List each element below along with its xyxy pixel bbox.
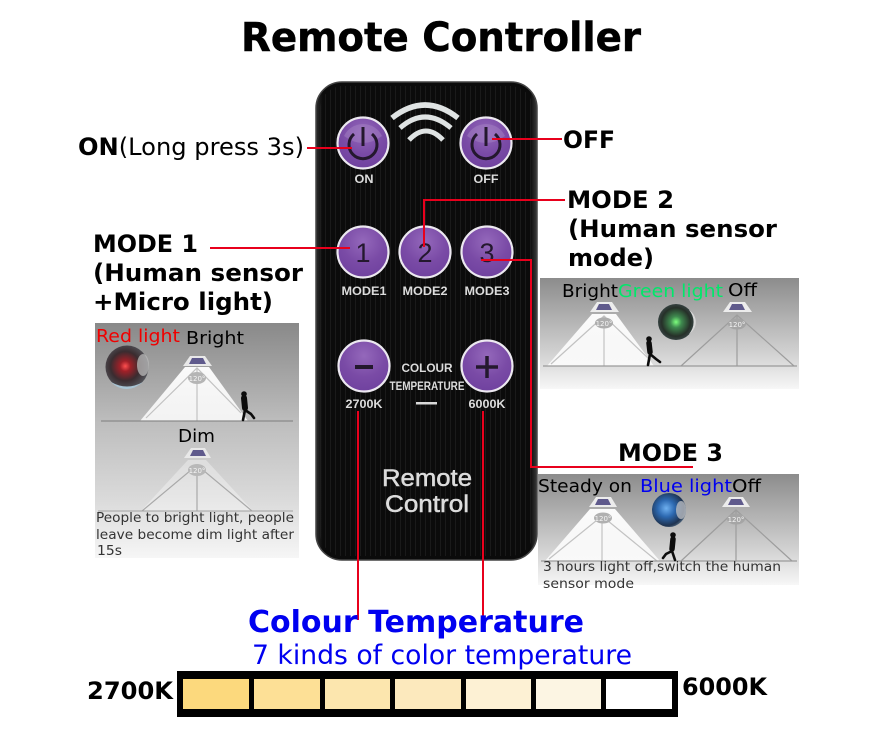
button: off: OFF: [474, 172, 498, 186]
off sensor outline: 120°: [728, 516, 744, 524]
remote control label: Remote: [382, 465, 472, 492]
icon: green indicator: [658, 304, 696, 340]
off sensor outline: 120°: [729, 321, 745, 329]
colour temperature heading: Colour Temperature: [248, 605, 584, 640]
bright label: Bright: [186, 328, 244, 349]
bright sensor light cone: [547, 302, 654, 366]
off label: Off: [728, 280, 758, 301]
label: mode 2: mode): [568, 244, 654, 272]
lower sensor light cone: [141, 448, 253, 511]
icon: running person: [241, 391, 254, 420]
title: Remote Controller: [241, 15, 641, 61]
mode 3 description: 3 hours light off,switch the human: [543, 559, 781, 575]
button: mode 1: MODE1: [342, 284, 387, 298]
button: mode 1: 1: [355, 238, 371, 268]
icon: running person: [646, 336, 660, 365]
remote control label: Control: [385, 491, 469, 518]
label: mode 1: +Micro light): [93, 288, 273, 316]
panel: mode 2 illustration: [540, 278, 799, 389]
label: on: ON(Long press 3s): [78, 133, 304, 161]
steady on label: Steady on: [538, 476, 632, 497]
label: mode 3: MODE 3: [618, 439, 723, 467]
button: mode 2: 2: [417, 238, 433, 268]
label: mode 1: MODE 1: [93, 230, 198, 258]
button: mode 3: 3: [479, 238, 495, 268]
button: mode 2: [400, 226, 450, 298]
label: mode 1: (Human sensor: [93, 259, 303, 287]
button: mode 2: MODE2: [402, 284, 448, 298]
steady sensor light cone: 120°: [595, 515, 611, 523]
button: plus 6000K: [462, 340, 512, 411]
button: mode 1: [338, 226, 388, 298]
remote control body: [316, 82, 537, 560]
button: minus 2700K: 2700K: [346, 397, 383, 411]
button: on: [338, 118, 388, 186]
label: mode 2: MODE 2: [567, 186, 674, 214]
icon: red indicator: [106, 346, 149, 389]
colour temperature label: COLOUR: [402, 361, 453, 375]
blue light label: Blue light: [640, 476, 732, 497]
dim label: Dim: [178, 426, 215, 447]
mode 3 description: [543, 559, 781, 592]
mode 1 description: People to bright light, people: [96, 510, 294, 526]
colour temperature scale: [177, 671, 678, 717]
scale label: 2700K: 2700K: [87, 677, 174, 705]
off label: Off: [732, 476, 762, 497]
mode 1 description: leave become dim light after: [96, 527, 294, 543]
icon: running person: [663, 532, 676, 560]
label: mode 2: [567, 186, 777, 272]
red light label: Red light: [96, 326, 180, 347]
panel: mode 3 illustration: [538, 474, 799, 592]
upper sensor light cone: 120°: [189, 375, 205, 383]
label: off: OFF: [563, 126, 615, 154]
panel: mode 1 illustration: [95, 323, 299, 559]
mode 1 description: [96, 510, 294, 559]
mode 3 description: sensor mode: [543, 576, 634, 592]
upper sensor light cone: [140, 356, 248, 421]
button: on: ON: [354, 172, 374, 186]
button: mode 3: MODE3: [464, 284, 510, 298]
bright label: Bright: [562, 281, 618, 302]
button: mode 3: [462, 226, 512, 298]
off sensor outline: [681, 302, 794, 366]
icon: blue indicator: [652, 493, 686, 527]
remote control label: [382, 465, 472, 518]
bright sensor light cone: 120°: [596, 320, 612, 328]
button: off: [460, 118, 512, 186]
label: mode 2: (Human sensor: [568, 215, 777, 243]
off sensor outline: [681, 497, 792, 561]
callout lines: [210, 139, 693, 620]
lower sensor light cone: 120°: [189, 467, 205, 475]
scale label: 6000K: 6000K: [682, 673, 768, 701]
label: mode 1: [93, 230, 303, 316]
steady sensor light cone: [545, 497, 660, 561]
button: minus 2700K: [338, 340, 390, 411]
green light label: Green light: [618, 281, 723, 302]
colour temperature label: TEMPERATURE: [390, 379, 464, 393]
icon: wireless signal: [392, 105, 458, 140]
mode 1 description: 15s: [97, 543, 122, 559]
button: plus 6000K: 6000K: [468, 397, 506, 411]
colour temperature subheading: 7 kinds of color temperature: [252, 640, 632, 671]
colour temperature label: [390, 361, 464, 404]
